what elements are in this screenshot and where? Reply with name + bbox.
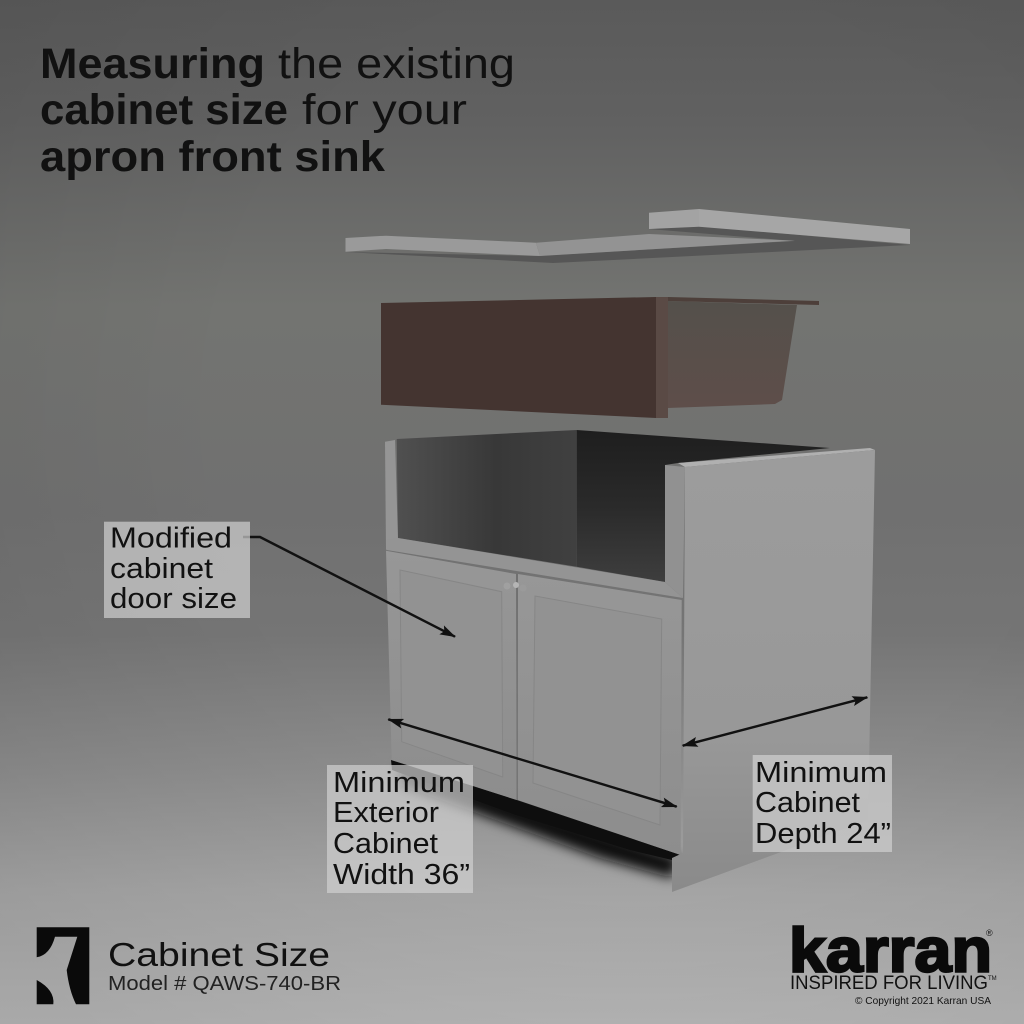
title: apron front sink xyxy=(40,133,385,181)
label: minimum exterior cabinet width xyxy=(327,765,473,893)
interior right wall xyxy=(577,430,830,582)
label: minimum cabinet depth: Depth 24” xyxy=(755,818,891,850)
label: modified cabinet door size xyxy=(104,522,250,618)
sink rim xyxy=(668,297,819,305)
countertop xyxy=(345,209,910,263)
section heading: cabinet size xyxy=(108,937,341,995)
cabinet side panel xyxy=(672,448,875,892)
sink basin xyxy=(668,301,797,408)
left door xyxy=(386,551,517,800)
title: cabinet size xyxy=(40,86,288,134)
label: minimum cabinet depth: Cabinet xyxy=(755,787,860,819)
right door xyxy=(517,574,682,855)
icon: karran K mark xyxy=(37,927,89,1004)
brand logo: karran: INSPIRED FOR LIVING xyxy=(790,973,988,994)
title: for your xyxy=(302,86,467,134)
label: minimum cabinet depth xyxy=(753,755,892,852)
label: minimum exterior cabinet width: Width 36” xyxy=(333,859,470,891)
brand logo: karran: TM xyxy=(988,976,997,982)
section heading: cabinet size: Cabinet Size xyxy=(108,937,330,974)
door knobs xyxy=(504,582,526,592)
label: modified cabinet door size: door size xyxy=(110,583,237,615)
arrow: cabinet width xyxy=(388,719,677,807)
label: minimum exterior cabinet width: Exterior xyxy=(333,797,440,829)
brand logo: karran: ® xyxy=(986,928,993,938)
title: the existing xyxy=(278,40,515,88)
face frame xyxy=(385,440,685,598)
title: Measuring xyxy=(40,40,265,88)
sink apron face xyxy=(381,297,656,418)
cabinet toe kick shadow xyxy=(391,760,681,860)
label: minimum cabinet depth: Minimum xyxy=(755,757,887,789)
cabinet xyxy=(385,430,875,892)
label: minimum exterior cabinet width: Minimum xyxy=(333,767,465,799)
brand logo: karran: karran xyxy=(789,916,992,986)
label: minimum exterior cabinet width: Cabinet xyxy=(333,828,438,860)
callout: modified door arrow xyxy=(243,537,455,637)
sink apron side xyxy=(656,297,668,418)
title xyxy=(40,40,515,181)
label: modified cabinet door size: cabinet xyxy=(110,553,213,585)
arrow: cabinet depth xyxy=(683,697,867,746)
apron front sink xyxy=(381,297,819,418)
floor shadow xyxy=(400,765,680,878)
interior left wall xyxy=(397,430,577,567)
model number: Model # QAWS-740-BR xyxy=(108,973,341,995)
brand logo: karran xyxy=(789,916,997,1007)
label: modified cabinet door size: Modified xyxy=(110,522,232,554)
brand logo: karran: © Copyright 2021 Karran USA xyxy=(855,995,991,1007)
